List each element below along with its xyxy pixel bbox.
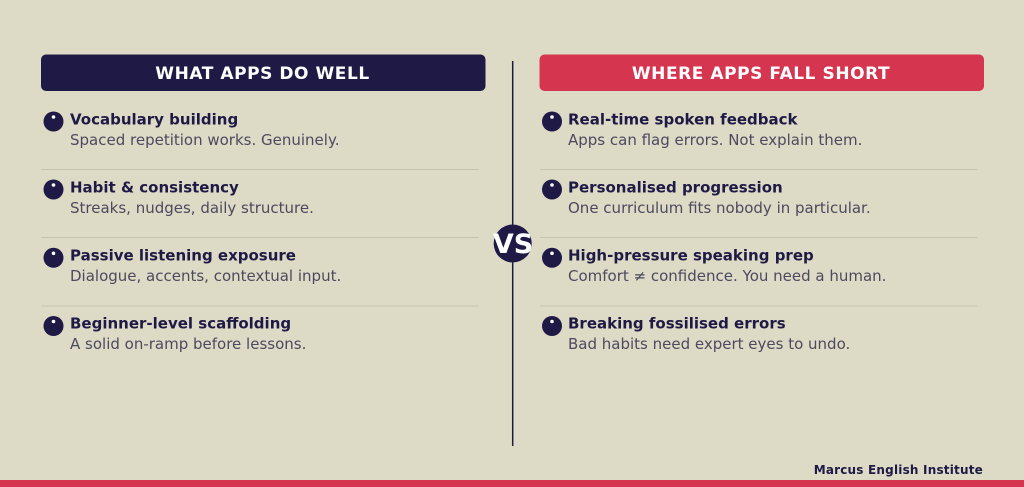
item: breaking fossilised errors: Bad habits need expert eyes to undo. xyxy=(568,335,850,353)
heading: what apps do well xyxy=(41,54,486,91)
item: vocabulary building xyxy=(44,110,339,149)
panel: where apps fall short xyxy=(540,54,984,353)
item: real-time spoken feedback: Apps can flag errors. Not explain them. xyxy=(568,131,862,149)
footer credit: Marcus English Institute xyxy=(814,463,983,477)
item: beginner-level scaffolding xyxy=(44,314,306,353)
item: personalised progression: Personalised progression xyxy=(568,178,783,196)
heading: where apps fall short: WHERE APPS FALL SHORT xyxy=(632,64,890,84)
item: real-time spoken feedback: Real-time spoken feedback xyxy=(568,110,799,128)
item: breaking fossilised errors: Breaking fossilised errors xyxy=(568,314,786,332)
item: passive listening exposure: Passive listening exposure xyxy=(70,246,296,264)
heading: what apps do well: WHAT APPS DO WELL xyxy=(155,64,370,84)
item: high-pressure speaking prep: High-pressure speaking prep xyxy=(568,246,814,264)
item: high-pressure speaking prep: Comfort ≠ confidence. You need a human. xyxy=(568,267,886,285)
panel: what apps do well xyxy=(41,54,486,353)
vertical divider line xyxy=(512,61,514,446)
bottom accent bar xyxy=(0,480,1024,487)
item: beginner-level scaffolding: A solid on-ramp before lessons. xyxy=(70,335,306,353)
vs badge: VS xyxy=(493,229,533,260)
item: real-time spoken feedback xyxy=(542,110,862,149)
item: breaking fossilised errors xyxy=(542,314,850,353)
item: habit and consistency: Habit & consistency xyxy=(70,178,239,196)
item: beginner-level scaffolding: Beginner-level scaffolding xyxy=(70,314,291,332)
item: passive listening exposure xyxy=(44,246,341,285)
item: vocabulary building: Spaced repetition works. Genuinely. xyxy=(70,131,339,149)
item: vocabulary building: Vocabulary building xyxy=(70,110,238,128)
item: habit and consistency: Streaks, nudges, daily structure. xyxy=(70,199,314,217)
item: habit and consistency xyxy=(44,178,314,217)
heading: where apps fall short xyxy=(540,54,984,91)
item: passive listening exposure: Dialogue, accents, contextual input. xyxy=(70,267,341,285)
item: personalised progression: One curriculum fits nobody in particular. xyxy=(568,199,871,217)
item: personalised progression xyxy=(542,178,871,217)
item: high-pressure speaking prep xyxy=(542,246,886,285)
